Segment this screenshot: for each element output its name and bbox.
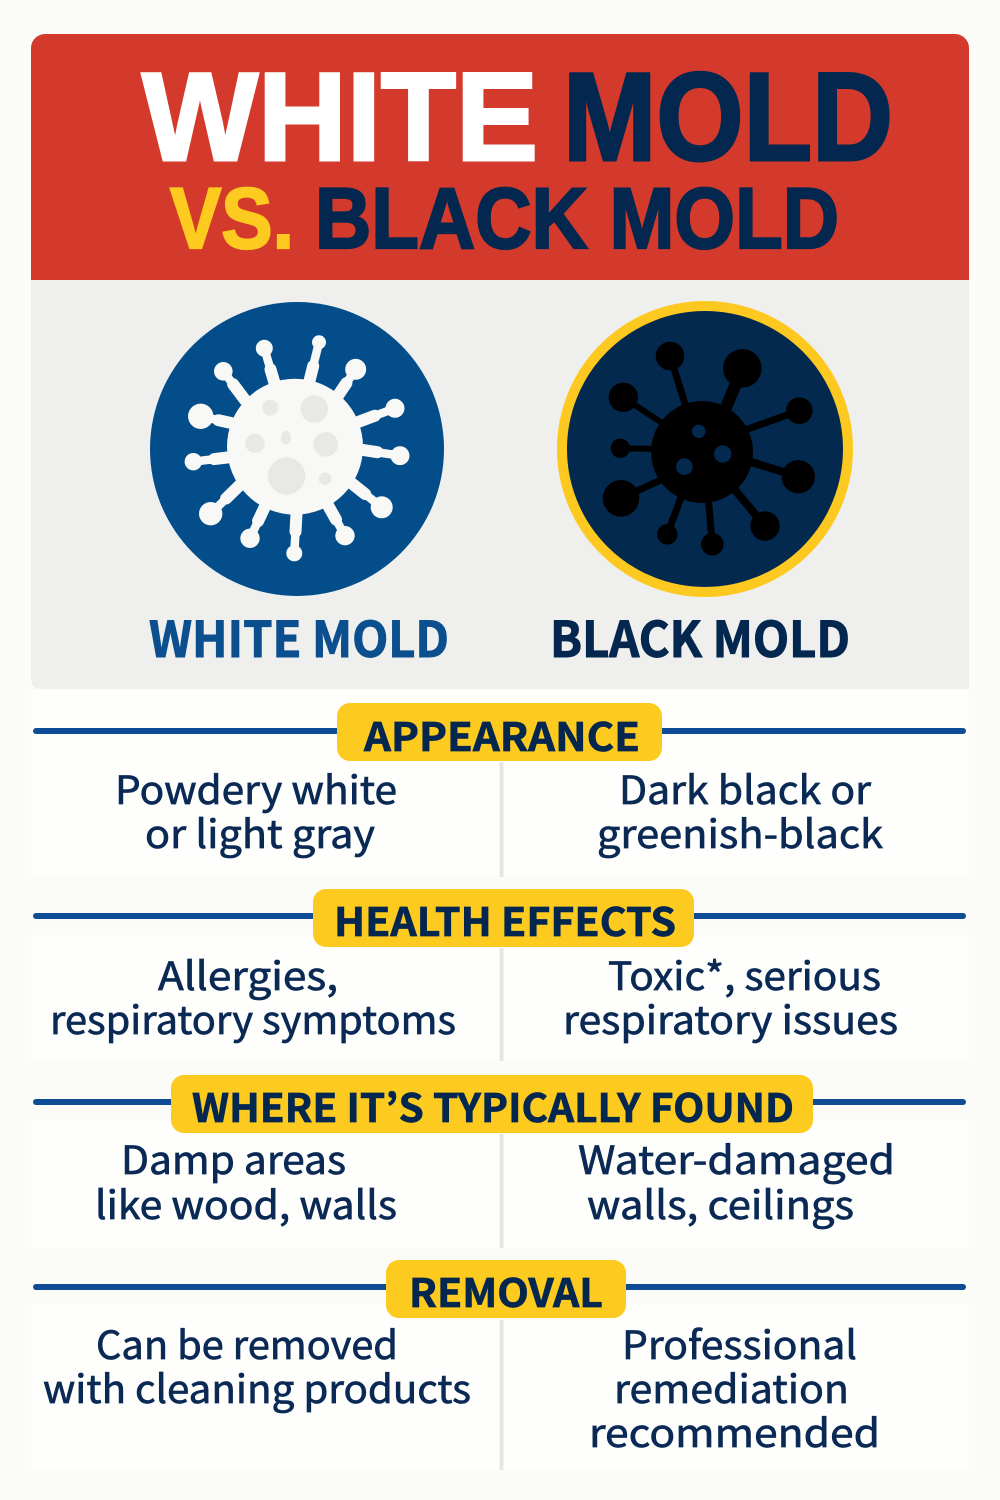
text: black mold health effects: respiratory issues — [563, 990, 898, 1046]
heading: appearance: APPEARANCE — [363, 707, 640, 763]
text: white mold location — [95, 1130, 397, 1231]
text: white mold health effects: respiratory symptoms — [50, 990, 456, 1046]
header banner — [31, 34, 969, 280]
section: removal — [31, 1260, 969, 1470]
text: white mold appearance — [115, 760, 397, 860]
text: white mold location: like wood, walls — [95, 1175, 397, 1231]
panel: mold comparison — [31, 280, 969, 689]
text: white mold location: Damp areas — [121, 1130, 346, 1186]
text: black mold health effects: Toxic*, serious — [608, 946, 881, 1002]
text: white mold health effects: Allergies, — [158, 946, 338, 1002]
text: black mold appearance — [597, 760, 884, 860]
section: where it's typically found — [31, 1075, 969, 1248]
heading: health effects: HEALTH EFFECTS — [334, 892, 676, 948]
title — [142, 48, 893, 267]
text: black mold location: walls, ceilings — [587, 1175, 854, 1231]
text: black mold location — [578, 1130, 895, 1231]
title: MOLD — [563, 48, 893, 187]
text: white mold appearance: or light gray — [145, 804, 375, 860]
text: black mold removal — [589, 1315, 880, 1459]
heading: removal: REMOVAL — [409, 1263, 603, 1319]
text: white mold health effects — [50, 946, 456, 1046]
text: black mold appearance: greenish-black — [597, 804, 884, 860]
text: white mold removal: Can be removed — [96, 1315, 398, 1371]
text: black mold removal: Professional — [622, 1315, 857, 1371]
text: black mold removal: recommended — [589, 1403, 880, 1459]
icon: black mold — [562, 306, 848, 592]
label: white mold: WHITE MOLD — [149, 601, 449, 672]
icon: white mold — [150, 302, 444, 596]
title: VS. — [170, 171, 294, 267]
heading: where it's typically found: WHERE IT’S TYPICALLY FOUND — [192, 1078, 794, 1134]
text: black mold removal: remediation — [614, 1359, 849, 1415]
text: black mold health effects — [563, 946, 898, 1046]
text: black mold location: Water-damaged — [578, 1130, 895, 1186]
text: white mold removal — [43, 1315, 471, 1415]
section: appearance — [31, 690, 969, 877]
text: black mold appearance: Dark black or — [619, 760, 872, 816]
title: WHITE — [142, 48, 538, 187]
title: BLACK MOLD — [315, 171, 839, 267]
text: white mold appearance: Powdery white — [115, 760, 397, 816]
section: health effects — [31, 889, 969, 1061]
label: black mold: BLACK MOLD — [550, 601, 850, 672]
text: white mold removal: with cleaning products — [43, 1359, 471, 1415]
